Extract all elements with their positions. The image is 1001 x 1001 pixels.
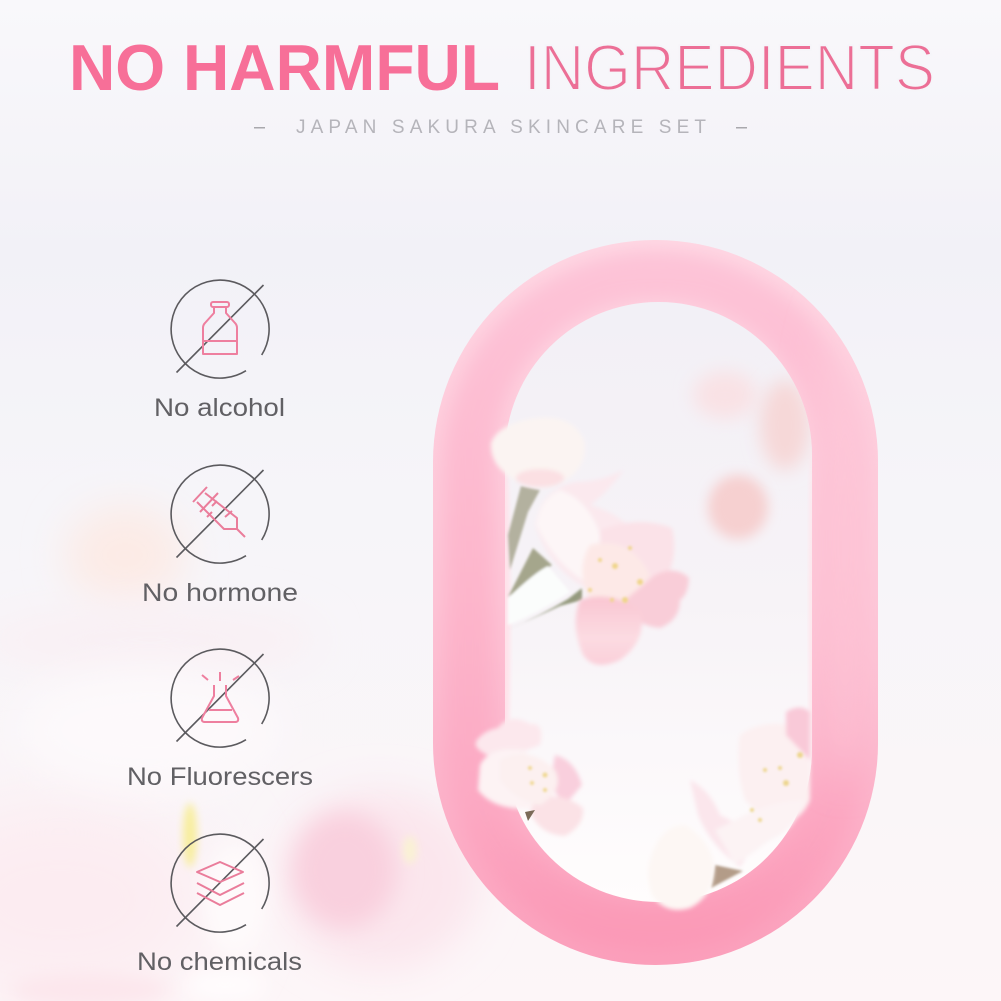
flower bud: [491, 418, 585, 488]
subtitle: JAPAN SAKURA SKINCARE SET: [296, 117, 706, 138]
icon: no alcohol: [171, 280, 269, 378]
ring window: [505, 302, 812, 902]
lower right blossoms: [648, 708, 810, 910]
title: [69, 31, 935, 104]
main flower stamens: [588, 546, 643, 603]
blurred background blossoms in window: [505, 371, 812, 750]
label: no fluorescers: No Fluorescers: [127, 763, 313, 791]
label: no alcohol: No alcohol: [154, 394, 285, 422]
label: no hormone: No hormone: [142, 579, 298, 607]
main flower: [535, 470, 689, 665]
label: no chemicals: No chemicals: [137, 948, 302, 976]
icon: no chemicals: [171, 834, 269, 932]
icon: no fluorescers: [171, 649, 269, 747]
top blossom with stem: [491, 418, 689, 665]
oval ring frame: [433, 240, 879, 965]
title: light part: INGREDIENTS: [524, 31, 935, 104]
lower left blossom: [476, 719, 583, 836]
stems: [508, 486, 582, 629]
icon: no hormone: [171, 465, 269, 563]
title: bold part: NO HARMFUL: [69, 31, 500, 104]
